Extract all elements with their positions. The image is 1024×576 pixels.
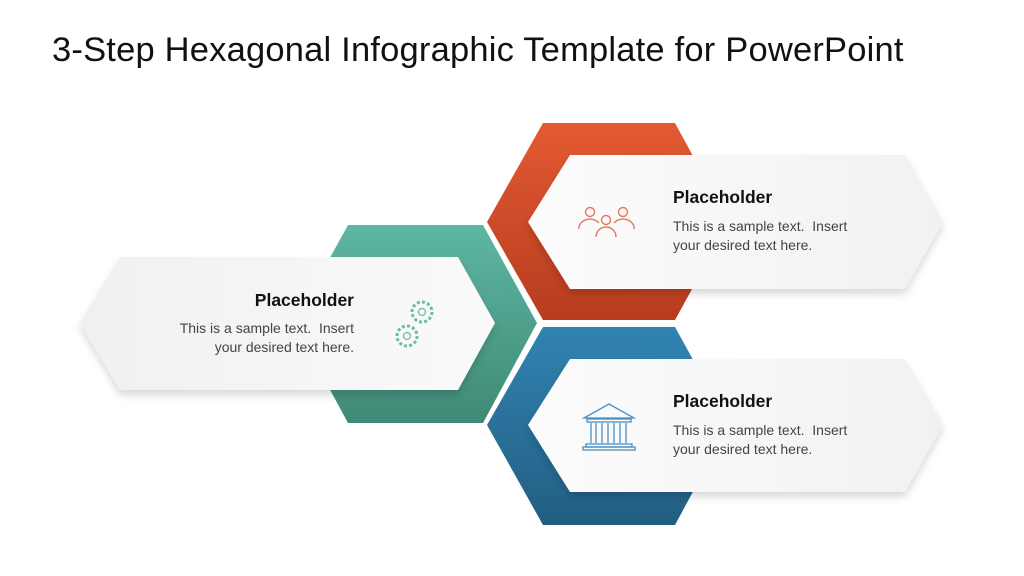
icon: gears bbox=[397, 302, 432, 346]
icon: bank bbox=[583, 404, 635, 450]
text: left bbox=[180, 290, 354, 355]
text: Placeholder bbox=[673, 187, 772, 207]
text: This is a sample text. Insert bbox=[180, 320, 354, 336]
icon: people bbox=[579, 208, 634, 237]
text: Placeholder bbox=[673, 391, 772, 411]
text: bottom right bbox=[673, 391, 848, 457]
text: Placeholder bbox=[255, 290, 354, 310]
text: your desired text here. bbox=[215, 339, 354, 355]
text: your desired text here. bbox=[673, 237, 812, 253]
hexagon: green bbox=[294, 225, 537, 423]
card: left bbox=[80, 257, 495, 390]
hexagon: blue bbox=[487, 327, 729, 525]
text: This is a sample text. Insert bbox=[673, 422, 847, 438]
text: top right bbox=[673, 187, 848, 253]
hexagon: orange bbox=[487, 123, 729, 320]
text: your desired text here. bbox=[673, 441, 812, 457]
title: 3-Step Hexagonal Infographic Template for PowerPoint bbox=[52, 31, 904, 69]
card: top right bbox=[528, 155, 943, 289]
card: bottom right bbox=[528, 359, 943, 492]
text: This is a sample text. Insert bbox=[673, 218, 847, 234]
